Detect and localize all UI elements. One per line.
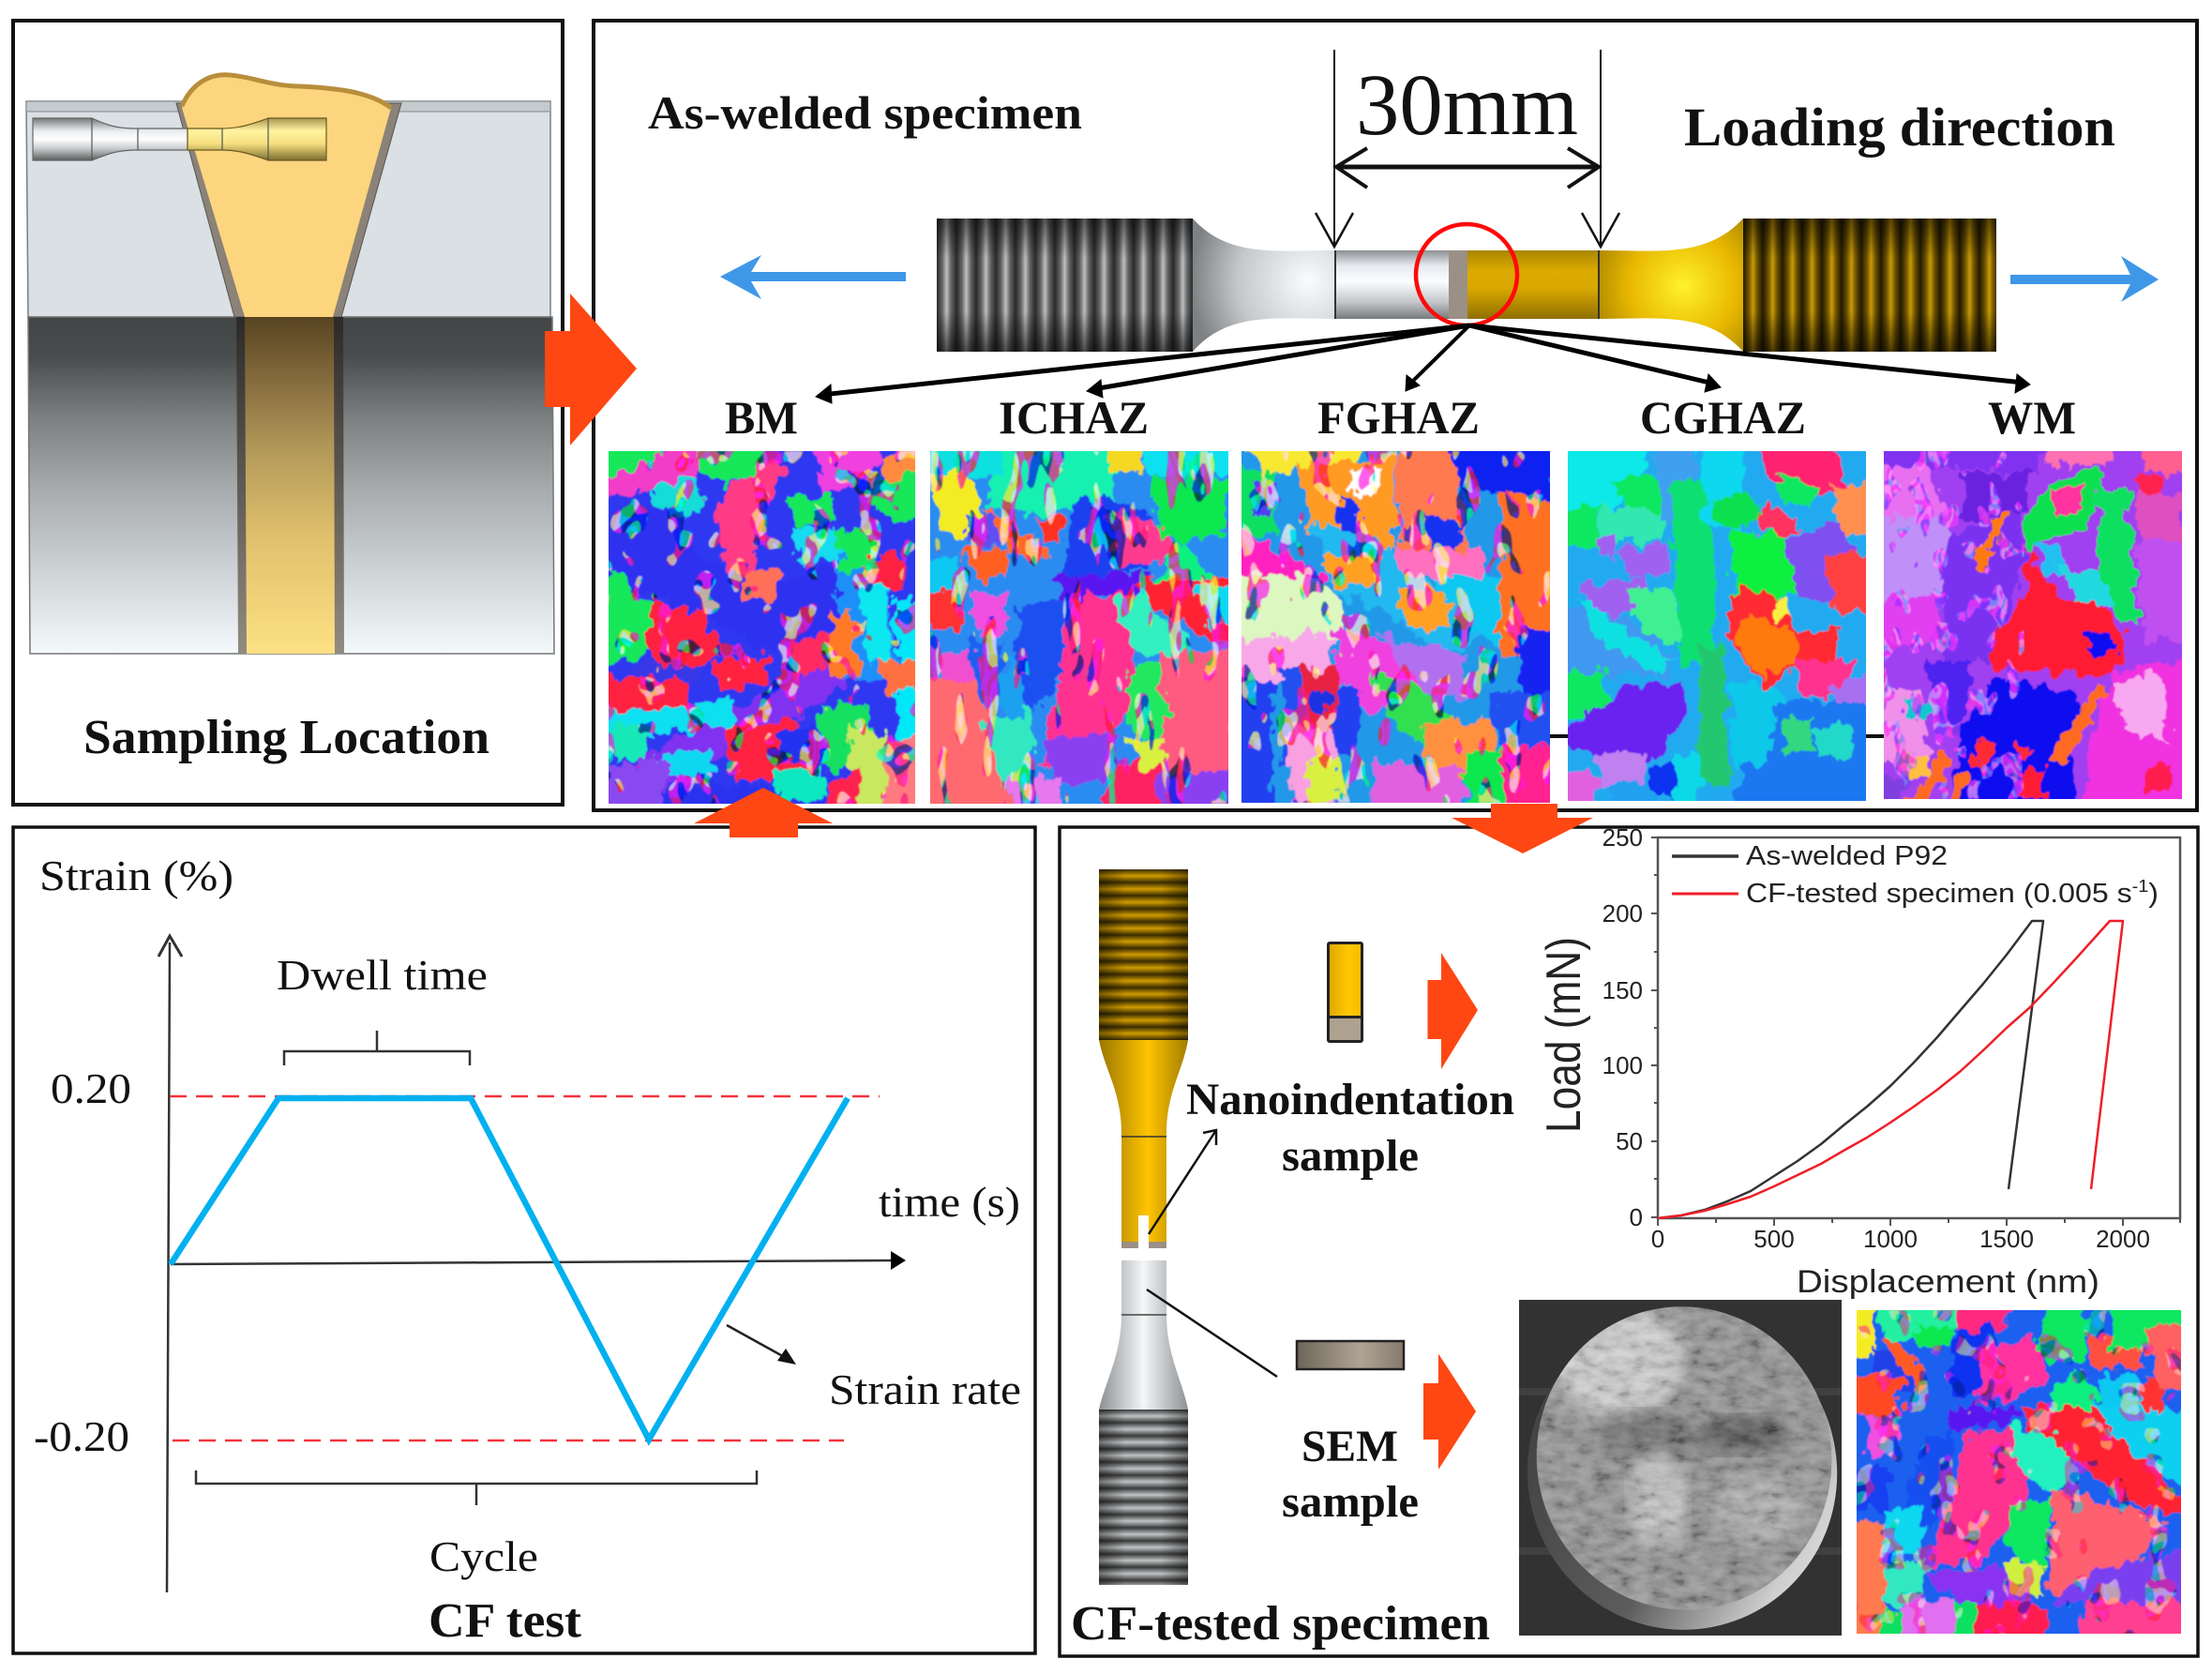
plot frame [1658,837,2180,1218]
label: Sampling Location: Sampling Location [83,711,489,764]
red circle highlight [1416,224,1517,325]
label: nanoindentation sample [1186,1075,1514,1181]
stray connector between maps [1550,734,1884,738]
label: SEM sample [1282,1422,1419,1527]
weld lower strip [236,317,344,654]
orange arrow: down from maps to specimen [1452,804,1593,853]
EBSD map: post-test [1857,1310,2181,1634]
arrow to nanoindentation label [1149,1130,1216,1234]
load displacement chart [1537,823,2180,1300]
label: 30mm: 30mm [1356,57,1578,154]
y tick labels: 100 [1603,1051,1643,1079]
left blue loading arrow [720,255,906,299]
label: strain rate: Strain rate [829,1365,1021,1413]
x tick labels: 1500 [1979,1225,2034,1253]
heading: as-welded specimen: As-welded specimen [648,86,1082,139]
label: SEM sample: SEM [1302,1422,1398,1471]
axis title: time: time (s) [879,1178,1020,1226]
line to SEM sample [1147,1289,1277,1377]
tick: 0.20: 0.20 [51,1064,131,1112]
y tick labels: 0 [1630,1203,1643,1231]
SEM fracture image [1519,1300,1842,1636]
specimen gold taper [1599,219,1743,352]
vertical specimen silver half [1099,1260,1188,1585]
right blue loading arrow [2010,256,2159,302]
y tick labels [1603,823,1643,1231]
panel: CF test strain waveform [13,827,1035,1653]
EBSD map: FGHAZ [1241,451,1550,803]
y tick labels: 250 [1603,823,1643,852]
x tick labels: 500 [1753,1225,1795,1253]
heading: loading direction: Loading direction [1684,97,2115,158]
gauge dimension arrows [1316,50,1619,247]
label: cycle: Cycle [429,1532,538,1580]
label: nanoindentation sample: Nanoindentation [1186,1075,1514,1124]
axis ticks [1651,837,2180,1226]
orange arrow: sampling to specimen [545,294,637,445]
legend: ) [2148,879,2159,909]
as-welded curve [1658,921,2043,1218]
CF-tested curve [1658,921,2123,1218]
x tick labels: 0 [1651,1225,1664,1253]
y tick labels: 200 [1603,899,1643,927]
zone pointer arrows [816,325,2030,403]
y tick labels: 50 [1616,1127,1643,1155]
x axis title: Displacement (nm) [1797,1264,2099,1300]
tensile specimen [937,219,1996,352]
label: SEM sample: sample [1282,1477,1419,1527]
EBSD map: WM [1884,451,2182,799]
panel frame [1060,827,2198,1656]
axis title: strain: Strain (%) [39,852,233,899]
zone label ICHAZ: ICHAZ [999,391,1149,444]
specimen gold neck [1467,250,1599,319]
x tick labels [1651,1225,2150,1253]
panel: CF-tested specimen and post analysis [1060,823,2207,1663]
cycle bracket [196,1470,757,1505]
panel: sampling location [13,21,563,805]
panel frame [13,827,1035,1653]
specimen right thread [1743,219,1996,352]
plate lower gradient block [28,317,554,654]
label: dwell time: Dwell time [277,951,488,999]
axes with arrowheads [158,936,895,1592]
SEM disc sample icon [1297,1341,1404,1369]
panel: as-welded specimen and EBSD maps [584,21,2205,832]
strain rate pointer arrow [727,1325,796,1365]
specimen silver taper [1193,219,1335,352]
panel frame [13,21,563,805]
dwell bracket [284,1031,470,1065]
x tick labels: 1000 [1863,1225,1918,1253]
tick: -0.20: -0.20 [34,1412,129,1460]
zone label WM: WM [1988,391,2076,444]
y tick labels: 150 [1603,976,1643,1004]
EBSD map: CGHAZ [1568,451,1866,801]
legend [1672,841,2159,909]
plate top chamfer [26,101,550,112]
orange arrow to SEM image [1423,1354,1476,1470]
legend: As-welded P92 [1746,841,1948,871]
strain waveform line [171,1098,848,1440]
nanoindentation sample icon [1327,942,1363,1043]
EBSD map: BM [609,451,915,804]
y axis title: Load (mN) [1537,937,1591,1133]
zone label CGHAZ: CGHAZ [1640,391,1806,444]
orange arrow to chart [1427,953,1478,1069]
x axis arrowhead [891,1251,906,1270]
specimen silver neck [1335,250,1449,319]
legend: -1 [2132,877,2148,896]
zone label BM: BM [725,391,798,444]
specimen left thread [937,219,1193,352]
x tick labels: 2000 [2096,1225,2150,1253]
zone label FGHAZ: FGHAZ [1317,391,1480,444]
legend: CF-tested specimen (0.005 s [1746,879,2095,909]
EBSD map: ICHAZ [930,451,1228,804]
plate top gray block [26,101,550,317]
heading: CF-tested specimen: CF-tested specimen [1071,1597,1490,1651]
small specimen in plate [33,118,326,160]
orange arrow: up from CF test to maps [694,788,833,837]
specimen HAZ band [1449,250,1467,319]
vertical specimen gold half [1099,869,1188,1249]
red dashed limits [170,1096,880,1440]
weld cross section with heat affected zones [176,73,401,317]
label: nanoindentation sample: sample [1282,1131,1419,1181]
heading: CF test: CF test [429,1594,582,1648]
panel frame [594,21,2197,810]
